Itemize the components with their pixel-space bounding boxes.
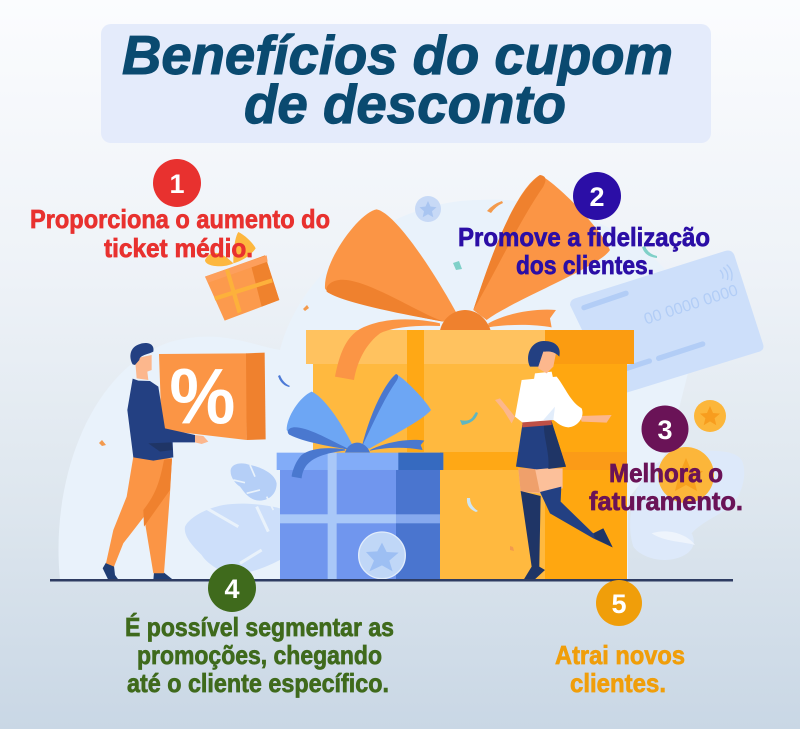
item 4 text bbox=[125, 612, 394, 698]
title: de desconto bbox=[244, 73, 566, 135]
number 2 badge bbox=[573, 172, 621, 220]
title: Benefícios do cupom bbox=[122, 24, 673, 86]
item 3 text: faturamento. bbox=[589, 486, 743, 516]
woman bbox=[495, 341, 613, 579]
item 4 text: até o cliente específico. bbox=[127, 668, 389, 698]
number 3 badge bbox=[642, 406, 688, 452]
shoes bbox=[103, 563, 119, 580]
blue gift bow bbox=[370, 440, 424, 451]
item 1 text: Proporciona o aumento do bbox=[30, 204, 330, 234]
man carrying box bbox=[103, 343, 266, 580]
leaves bbox=[185, 463, 280, 574]
item 5: 5 bbox=[611, 589, 627, 619]
head bbox=[135, 355, 152, 380]
hand bbox=[195, 435, 208, 444]
item 4: 4 bbox=[224, 574, 240, 604]
card number: 00 0000 0000 bbox=[642, 282, 740, 328]
item 5 bbox=[555, 580, 685, 698]
percent symbol: % bbox=[169, 351, 235, 440]
item 5 text: Atrai novos bbox=[555, 640, 685, 670]
item 4 text: É possível segmentar as bbox=[125, 612, 394, 642]
blue gift coin bbox=[359, 532, 405, 579]
small leaf bbox=[231, 463, 277, 501]
item 3: 3 bbox=[657, 415, 673, 445]
star coin top bbox=[415, 196, 441, 222]
item 1 text: ticket médio. bbox=[104, 233, 253, 263]
coins bbox=[658, 400, 726, 503]
item 3 text bbox=[589, 458, 743, 516]
item 1 bbox=[30, 159, 330, 263]
hanging ribbon bbox=[335, 319, 440, 380]
big gift bow bbox=[325, 175, 610, 330]
item 1: 1 bbox=[169, 169, 185, 199]
large leaf bbox=[185, 504, 280, 574]
item 5 text bbox=[555, 640, 685, 698]
number 1 badge bbox=[153, 159, 201, 207]
item 2 bbox=[458, 172, 710, 280]
title panel bbox=[101, 24, 711, 143]
number 4 badge bbox=[208, 564, 256, 612]
item 1 text bbox=[30, 204, 330, 263]
title bbox=[122, 24, 673, 135]
small orange gift bbox=[205, 232, 279, 321]
confetti bbox=[99, 201, 657, 551]
item 4 bbox=[125, 564, 394, 698]
item 5 text: clientes. bbox=[570, 668, 666, 698]
background blobs bbox=[58, 200, 700, 580]
item 2 text: Promove a fidelização bbox=[458, 222, 710, 252]
item 2: 2 bbox=[589, 182, 605, 212]
big gift lid and body bbox=[313, 364, 627, 580]
item 2 text bbox=[458, 222, 710, 280]
woman head bbox=[528, 341, 560, 387]
woman lower body bbox=[495, 377, 613, 579]
item 4 text: promoções, chegando bbox=[137, 640, 382, 670]
big gift bbox=[306, 175, 634, 580]
item 3 bbox=[589, 406, 743, 516]
blue gift bbox=[277, 374, 443, 579]
sweater bbox=[127, 379, 195, 461]
credit card bbox=[570, 250, 763, 393]
trousers bbox=[106, 457, 172, 573]
item 2 text: dos clientes. bbox=[516, 250, 654, 280]
number 5 badge bbox=[596, 580, 642, 626]
item 3 text: Melhora o bbox=[609, 458, 723, 488]
right plant bbox=[630, 451, 744, 560]
box bbox=[159, 353, 247, 440]
ground line bbox=[50, 579, 733, 582]
